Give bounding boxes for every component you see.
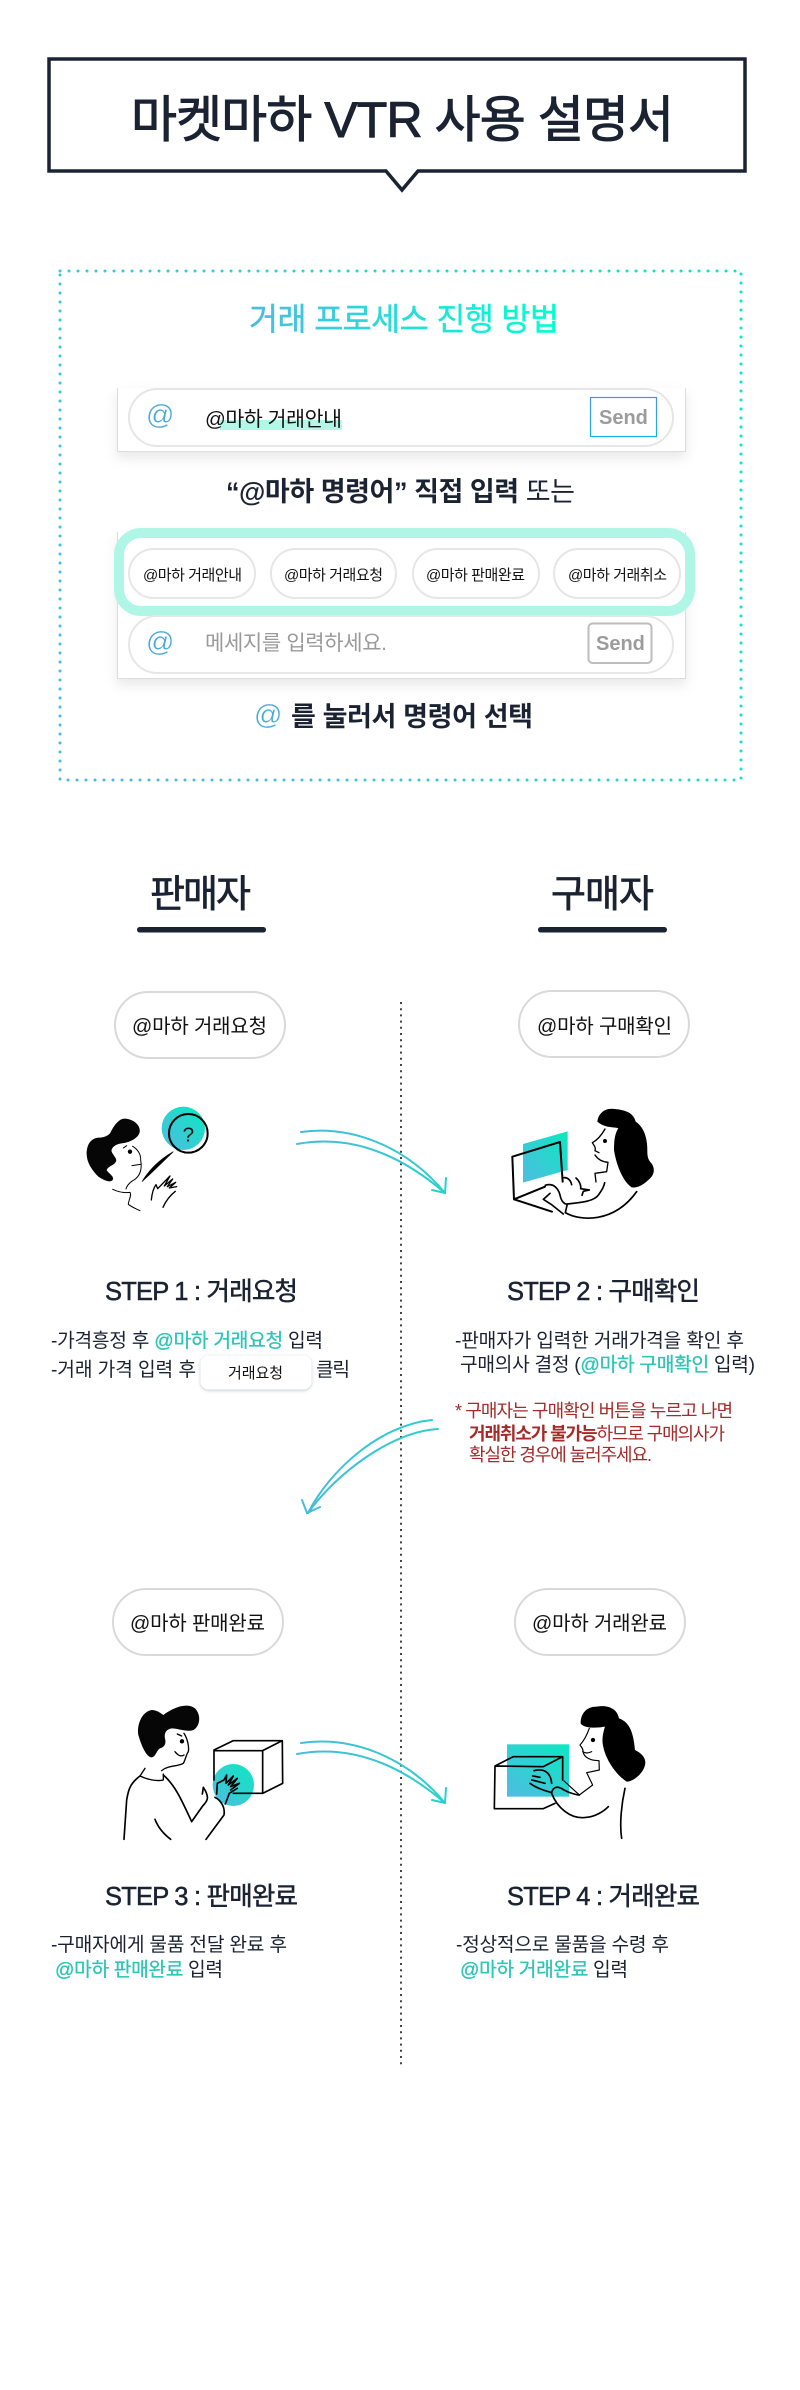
buyer warning note: * 구매자는 구매확인 버튼을 누르고 나면 <box>455 1401 733 1421</box>
caption: direct input: “@마하 명령어” 직접 입력 또는 <box>226 477 575 507</box>
chip: cancel <box>554 549 680 598</box>
column heading: buyer: 구매자 <box>551 874 654 916</box>
typed command text: @마하 거래안내 <box>205 408 342 431</box>
step 3 description <box>51 1934 287 1981</box>
chip: sale complete: @마하 판매완료 <box>426 567 525 584</box>
command chip: step 4 <box>515 1589 685 1655</box>
command chip: step 3 <box>113 1589 283 1655</box>
send button outlined: Send <box>599 407 648 429</box>
input pill with placeholder: Send <box>596 633 645 655</box>
step 1 heading: STEP 1 : 거래요청 <box>105 1278 298 1306</box>
chip: guide: @마하 거래안내 <box>143 567 242 584</box>
chip: guide <box>129 549 255 598</box>
curved arrow: step 2 to step 3 <box>302 1420 438 1513</box>
step 2 description: -판매자가 입력한 거래가격을 확인 후 <box>455 1330 744 1352</box>
step 1 description <box>51 1330 350 1390</box>
caption: press at sign: 를 눌러서 명령어 선택 <box>291 702 533 732</box>
center dotted divider <box>400 1002 402 2067</box>
column heading: seller <box>137 874 266 932</box>
command chip: step 2: @마하 구매확인 <box>537 1015 672 1038</box>
illustration: person with question bubble: ? <box>183 1124 194 1147</box>
step 2 description: 구매의사 결정 (@마하 구매확인 입력) <box>460 1354 755 1376</box>
chip: request: @마하 거래요청 <box>284 567 383 584</box>
chip: sale complete <box>413 549 539 598</box>
step 1 description: 클릭 <box>316 1359 350 1381</box>
chip highlight frame <box>119 533 690 611</box>
title speech bubble: 마켓마하 VTR 사용 설명서 <box>131 92 674 148</box>
column heading: seller: 판매자 <box>150 874 251 916</box>
message input mockup: typed command <box>118 388 686 452</box>
curved arrow: step 3 to step 4 <box>297 1742 446 1803</box>
button: request <box>200 1356 312 1390</box>
step 4 heading: STEP 4 : 거래완료 <box>507 1883 700 1911</box>
command chip: step 1: @마하 거래요청 <box>132 1015 267 1038</box>
message input mockup: command chips <box>118 532 690 678</box>
command chip: step 2 <box>519 991 689 1057</box>
illustration: person at laptop <box>512 1109 654 1218</box>
buyer warning note: 확실한 경우에 눌러주세요. <box>469 1445 652 1465</box>
illustration: person with question bubble <box>87 1107 208 1211</box>
step 3 heading: STEP 3 : 판매완료 <box>105 1883 298 1911</box>
step 4 description <box>456 1934 669 1981</box>
panel heading: 거래 프로세스 진행 방법 <box>249 301 559 337</box>
command chip: step 4: @마하 거래완료 <box>532 1612 667 1635</box>
send button outlined <box>590 398 656 436</box>
input pill with placeholder <box>129 616 673 673</box>
command chip: step 1 <box>115 992 285 1058</box>
buyer warning note <box>455 1401 733 1465</box>
illustration: person receiving box <box>494 1706 645 1838</box>
command chip: step 3: @마하 판매완료 <box>130 1612 265 1635</box>
column heading: buyer <box>538 874 667 932</box>
step 4 description: -정상적으로 물품을 수령 후 <box>456 1934 669 1956</box>
input pill with placeholder: 메세지를 입력하세요. <box>205 632 387 655</box>
input pill with placeholder: @ <box>146 626 174 657</box>
title speech bubble <box>49 59 745 190</box>
icon: at sign: @ <box>146 399 174 430</box>
button: request: 거래요청 <box>228 1365 283 1382</box>
step 2 description <box>455 1330 755 1376</box>
step 1 description: -가격흥정 후 @마하 거래요청 입력 <box>51 1330 323 1352</box>
chip: request <box>271 549 396 598</box>
command highlight <box>220 420 342 430</box>
illustration: person with box <box>124 1706 283 1839</box>
caption: press at sign: @ <box>254 699 282 730</box>
step 3 description: -구매자에게 물품 전달 완료 후 <box>51 1934 287 1956</box>
panel: trade process guide <box>60 271 741 780</box>
chip: cancel: @마하 거래취소 <box>568 567 667 584</box>
step 3 description: @마하 판매완료 입력 <box>55 1959 223 1981</box>
curved arrow: step 1 to step 2 <box>297 1131 446 1193</box>
step 1 description: -거래 가격 입력 후 <box>51 1359 196 1381</box>
buyer warning note: 거래취소가 불가능하므로 구매의사가 <box>469 1424 725 1444</box>
step 4 description: @마하 거래완료 입력 <box>460 1959 628 1981</box>
step 2 heading: STEP 2 : 구매확인 <box>507 1278 700 1306</box>
